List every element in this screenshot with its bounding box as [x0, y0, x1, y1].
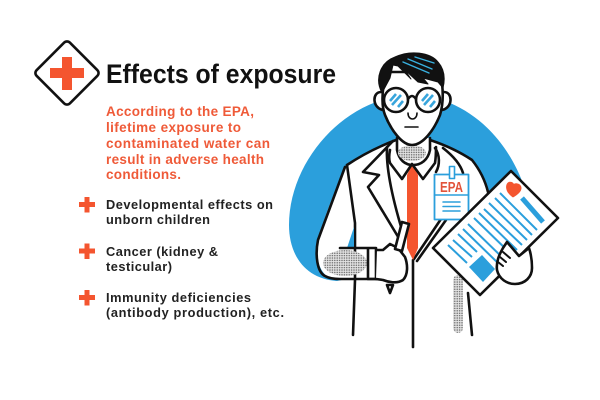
glasses: [384, 88, 440, 112]
right hand: [497, 242, 532, 284]
icon: medical cross diamond: [34, 40, 100, 106]
intro text block: According to the EPA,: [106, 104, 254, 119]
heart: [507, 183, 520, 196]
intro text block: result in adverse health: [106, 152, 264, 167]
bullet: cancer: testicular): [106, 259, 172, 274]
red tie: [407, 163, 418, 260]
head: [374, 53, 451, 145]
intro text block: lifetime exposure to: [106, 120, 241, 135]
intro text block: [106, 104, 270, 182]
intro text block: conditions.: [106, 167, 181, 182]
intro text block: contaminated water can: [106, 136, 270, 151]
lab coat: [317, 140, 492, 347]
title: Effects of exposure: [106, 59, 336, 89]
blue background blob: [289, 100, 524, 281]
EPA badge: EPA: [440, 179, 463, 196]
shirt stipple: right side: [453, 275, 463, 333]
hair highlights: [403, 57, 434, 73]
bullet list: [79, 197, 284, 320]
neck: [397, 138, 430, 165]
nose and mouth: [405, 113, 418, 127]
report image block: [469, 255, 495, 282]
bullet: immunity deficiencies: [79, 290, 284, 320]
shirt collar: [389, 147, 436, 179]
bullet: developmental effects: Developmental effects on: [106, 197, 273, 212]
doctor illustration: [317, 53, 558, 347]
report lines: [448, 193, 537, 265]
bullet: developmental effects: [79, 197, 273, 227]
bullet: cancer: Cancer (kidney &: [106, 244, 218, 259]
bullet: immunity deficiencies: (antibody production), etc.: [106, 305, 284, 320]
bullet: cancer: [79, 244, 218, 274]
hair: [379, 53, 444, 93]
bullet: immunity deficiencies: Immunity deficiencies: [106, 290, 251, 305]
medical report document: [433, 171, 558, 295]
pen and left hand: [376, 222, 409, 293]
bullet: developmental effects: unborn children: [106, 212, 210, 227]
EPA badge: [434, 166, 468, 220]
left cuff and sleeve: [323, 248, 376, 279]
